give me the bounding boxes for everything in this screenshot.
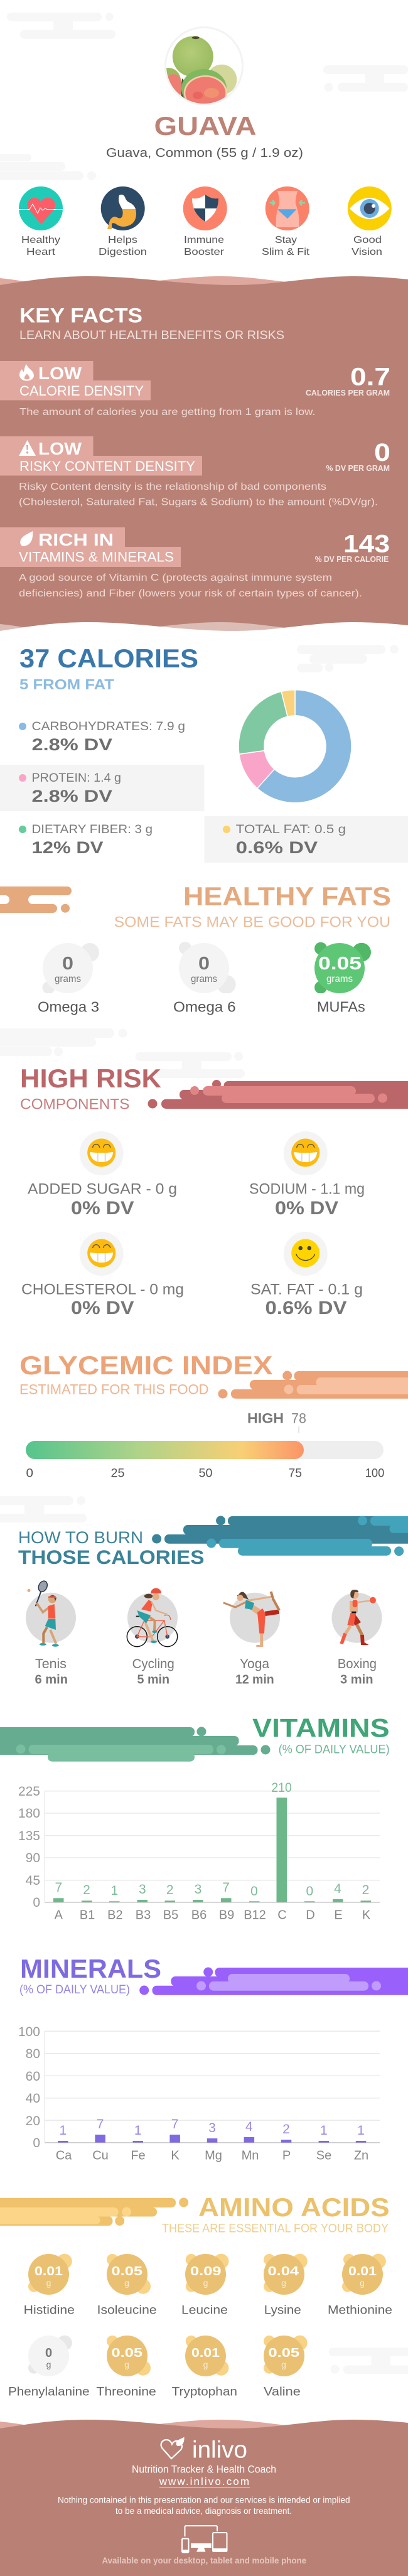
background clouds: below fats — [0, 1028, 245, 1078]
bar chart: vitamins: 3 — [139, 1882, 146, 1897]
bar chart: vitamins: 0 — [33, 1895, 40, 1910]
amino: tryptophan: g — [203, 2359, 208, 2369]
activity durations: 6 min — [35, 1673, 68, 1687]
bar chart: vitamins: B1 — [80, 1909, 95, 1922]
activity durations: 5 min — [137, 1673, 169, 1687]
bar chart: minerals: 1 — [59, 2123, 67, 2138]
heading: HIGH RISK — [20, 1064, 161, 1093]
risk: cholesterol: CHOLESTEROL - 0 mg — [21, 1281, 184, 1298]
amino: leucine: g — [203, 2278, 208, 2288]
name: risky content density: RISKY CONTENT DENSITY — [19, 458, 195, 474]
macro: dietary fiber: 12% DV — [31, 838, 103, 857]
heading: MINERALS — [20, 1954, 161, 1983]
label: healthy heart: Healthy — [21, 235, 60, 245]
icon: devices — [182, 2526, 227, 2553]
bar chart: vitamins: 4 — [334, 1882, 341, 1896]
bar chart: minerals: 3 — [208, 2121, 216, 2135]
fat: mufas: 0.05 — [318, 954, 362, 974]
amino: lysine — [264, 2254, 308, 2317]
heading line 2: THOSE CALORIES — [18, 1546, 205, 1568]
icon: warning — [19, 440, 36, 456]
bar chart: vitamins: B3 — [136, 1909, 151, 1922]
heading line 1: HOW TO BURN — [18, 1528, 143, 1547]
key facts subheading: LEARN ABOUT HEALTH BENEFITS OR RISKS — [19, 328, 284, 342]
header decoration — [0, 2197, 188, 2226]
label: stay slim and fit: Slim & Fit — [262, 247, 310, 257]
heading: VITAMINS — [252, 1713, 390, 1743]
availability note: Available on your desktop, tablet and mobile phone — [102, 2555, 306, 2565]
unit: calories per gram: CALORIES PER GRAM — [306, 388, 390, 397]
icon: flame — [19, 364, 34, 380]
activity durations: 12 min — [235, 1673, 274, 1687]
gi scale: 75 — [289, 1467, 302, 1480]
fact: calorie density — [0, 361, 390, 418]
disclaimer: to be a medical advice, diagnosis or treatment. — [115, 2506, 292, 2516]
bar chart: vitamins: 180 — [18, 1806, 40, 1821]
activity: boxing — [331, 1590, 382, 1645]
amino: phenylalanine: Phenylalanine — [8, 2385, 90, 2398]
subheading: (% OF DAILY VALUE) — [279, 1743, 390, 1757]
disclaimer: Nothing contained in this presentation and our services is intended or implied — [58, 2496, 350, 2505]
unit: percent dv per gram: % DV PER GRAM — [326, 463, 390, 473]
title: GUAVA — [154, 111, 256, 141]
bar chart: minerals: Mg — [205, 2148, 222, 2162]
bar chart: minerals: 7 — [171, 2117, 178, 2131]
risk: added sugar: ADDED SUGAR - 0 g — [28, 1181, 177, 1198]
bar chart: minerals: Se — [316, 2148, 331, 2162]
fat: omega 6 — [173, 942, 236, 1015]
panel: how to burn calories — [18, 1516, 408, 1687]
fat: mufas — [314, 942, 371, 1015]
description: deficiencies) and Fiber (lowers your risk of certain types of cancer). — [19, 588, 362, 599]
amino: lysine: Lysine — [264, 2304, 301, 2317]
bar chart: vitamins: B9 — [219, 1909, 234, 1922]
icon: digestion — [101, 186, 145, 230]
amino: valine — [264, 2336, 308, 2398]
bar chart: vitamins: B12 — [244, 1909, 266, 1922]
icon: good vision — [348, 186, 392, 230]
background cloud — [297, 645, 399, 672]
background clouds: header — [0, 13, 408, 180]
macro: total fat — [205, 816, 408, 863]
gi scale: 100 — [365, 1467, 384, 1480]
fat: mufas: MUFAs — [317, 999, 365, 1015]
panel: amino acids — [0, 2192, 392, 2398]
bar chart: vitamins: 135 — [18, 1829, 40, 1843]
subheading: SOME FATS MAY BE GOOD FOR YOU — [114, 914, 390, 931]
subheading: ESTIMATED FOR THIS FOOD — [19, 1382, 208, 1398]
heading: AMINO ACIDS — [198, 2192, 390, 2222]
gi gauge bar — [26, 1441, 384, 1459]
macro: dietary fiber — [19, 823, 153, 857]
label: healthy heart: Heart — [26, 247, 56, 257]
bar chart: minerals: Zn — [354, 2148, 368, 2162]
activity: yoga — [223, 1592, 280, 1647]
gi scale: 25 — [110, 1467, 124, 1480]
bar chart: vitamins: E — [334, 1909, 343, 1922]
background cloud: glycemic — [0, 1496, 87, 1522]
risk: saturated fat — [250, 1232, 363, 1318]
header decoration — [0, 1727, 270, 1762]
activity durations — [35, 1673, 373, 1687]
macro: total fat: TOTAL FAT: 0.5 g — [236, 823, 346, 836]
bar chart: vitamins: 3 — [195, 1882, 201, 1897]
bar chart: minerals: 1 — [134, 2123, 142, 2138]
bar chart: minerals: Mn — [242, 2148, 259, 2162]
bar chart: vitamins: A — [55, 1909, 63, 1922]
label: immune booster: Immune — [184, 235, 224, 245]
bar chart: minerals: 2 — [282, 2122, 290, 2137]
amino: phenylalanine: g — [46, 2359, 51, 2369]
amino: phenylalanine — [8, 2336, 90, 2398]
bar chart: vitamins: 7 — [222, 1880, 230, 1895]
risk: added sugar: 0% DV — [71, 1198, 134, 1219]
amino: threonine: 0.05 — [112, 2346, 142, 2360]
gi scale: 50 — [198, 1467, 212, 1480]
amino: threonine: Threonine — [96, 2385, 156, 2398]
bar chart: vitamins: B6 — [191, 1909, 207, 1922]
amino: isoleucine: g — [124, 2278, 129, 2288]
key facts heading: KEY FACTS — [19, 304, 142, 326]
unit: percent dv per calorie: % DV PER CALORIE — [315, 554, 389, 564]
description: The amount of calories you are getting from 1 gram is low. — [19, 407, 315, 418]
bar chart: vitamins: D — [306, 1909, 315, 1922]
amino: threonine: g — [124, 2359, 129, 2369]
bar chart: vitamins: 210 — [271, 1781, 292, 1795]
label: immune booster: Booster — [184, 247, 225, 257]
website: www.inlivo.com — [159, 2476, 249, 2487]
gi marker — [247, 1411, 306, 1433]
amino: tryptophan: 0.01 — [191, 2346, 220, 2360]
label: good vision: Good — [353, 235, 382, 245]
subheading: (% OF DAILY VALUE) — [19, 1983, 130, 1997]
rating: low: LOW — [38, 364, 82, 383]
bar chart: vitamins: 90 — [26, 1851, 40, 1865]
panel: calories — [0, 644, 408, 863]
fact: risky content density — [0, 436, 390, 508]
fat: omega 6: 0 — [198, 954, 210, 974]
fat: omega 3: grams — [55, 974, 81, 984]
amino: leucine — [181, 2254, 228, 2317]
header decoration — [218, 1371, 408, 1399]
bar chart: vitamins: 1 — [111, 1883, 118, 1898]
amino: methionine: g — [360, 2278, 365, 2288]
header decoration — [0, 887, 72, 913]
activity: cycling — [127, 1588, 178, 1647]
amino: tryptophan — [172, 2336, 237, 2398]
name: calorie density: CALORIE DENSITY — [19, 383, 144, 399]
bar chart: minerals: Fe — [131, 2148, 146, 2162]
bar chart: vitamins: 45 — [26, 1873, 40, 1888]
bar chart: minerals — [18, 2025, 380, 2162]
risk: saturated fat: SAT. FAT - 0.1 g — [250, 1281, 363, 1298]
macro: carbohydrates — [19, 720, 185, 754]
subheading: THESE ARE ESSENTIAL FOR YOUR BODY — [162, 2221, 389, 2235]
lower wave — [0, 622, 286, 634]
macro: dietary fiber: DIETARY FIBER: 3 g — [31, 823, 153, 836]
risk: sodium: SODIUM - 1.1 mg — [249, 1181, 365, 1198]
description: A good source of Vitamin C (protects against immune system — [19, 573, 332, 583]
bar chart: minerals: 1 — [320, 2123, 328, 2138]
risk: added sugar — [28, 1131, 177, 1219]
amino: tryptophan: Tryptophan — [172, 2385, 237, 2398]
bar chart: minerals: 20 — [26, 2114, 40, 2128]
risk: sodium — [249, 1131, 365, 1219]
header decoration — [148, 1080, 408, 1109]
value: 143: 143 — [343, 531, 390, 558]
bar chart: minerals: Cu — [92, 2148, 109, 2162]
bar chart: minerals: 40 — [26, 2091, 40, 2106]
fat: omega 6: Omega 6 — [173, 999, 236, 1015]
serving subtitle: Guava, Common (55 g / 1.9 oz) — [106, 146, 303, 160]
food photo: guava — [164, 26, 244, 105]
gi marker: HIGH — [247, 1411, 284, 1426]
amino: lysine: 0.04 — [267, 2265, 299, 2278]
activity labels: Tenis — [35, 1657, 67, 1671]
amino: valine: g — [281, 2359, 286, 2369]
fat: omega 3 — [38, 943, 99, 1015]
rating: low: LOW — [38, 439, 82, 458]
heading: HEALTHY FATS — [183, 881, 391, 911]
bar chart: minerals: K — [171, 2148, 180, 2162]
bar chart: minerals: 80 — [26, 2047, 40, 2061]
label: digestion: Digestion — [99, 247, 147, 257]
bar chart: vitamins: B2 — [107, 1909, 123, 1922]
amino: histidine: 0.01 — [35, 2265, 63, 2278]
amino: leucine: Leucine — [181, 2304, 228, 2317]
header decoration — [139, 1968, 408, 1995]
gi scale: 0 — [26, 1467, 33, 1480]
gi marker: 78 — [291, 1411, 306, 1426]
icon: slim and fit — [266, 186, 309, 230]
risk: cholesterol — [21, 1232, 184, 1318]
fat: omega 3: 0 — [62, 954, 73, 974]
fat: omega 6: grams — [191, 974, 217, 984]
bar chart: minerals: 7 — [97, 2117, 104, 2131]
subheading: COMPONENTS — [20, 1096, 129, 1113]
bar chart: minerals: 1 — [357, 2123, 365, 2138]
amino: valine: Valine — [264, 2385, 301, 2398]
label: digestion: Helps — [108, 235, 137, 245]
macro: carbohydrates: 2.8% DV — [31, 735, 112, 754]
value: 0: 0 — [374, 439, 390, 466]
bar chart: vitamins: 2 — [83, 1883, 90, 1897]
fat: mufas: grams — [326, 974, 353, 984]
amino: methionine — [328, 2254, 392, 2317]
bar chart: vitamins: 2 — [166, 1883, 174, 1897]
bar chart: vitamins: C — [277, 1909, 287, 1922]
activity labels: Boxing — [338, 1657, 377, 1671]
icon: immune shield — [183, 186, 227, 230]
fat: omega 3: Omega 3 — [38, 999, 99, 1015]
bar chart: minerals: Ca — [56, 2148, 72, 2162]
panel: minerals — [18, 1954, 408, 2162]
bar chart: vitamins: B5 — [163, 1909, 178, 1922]
risk: sodium: 0% DV — [275, 1198, 338, 1219]
panel: glycemic index — [19, 1350, 408, 1480]
calories from fat: 5 FROM FAT — [19, 676, 114, 693]
bar chart: vitamins: 0 — [250, 1884, 258, 1899]
bar chart: minerals: 0 — [33, 2136, 40, 2150]
bar chart: minerals: 4 — [245, 2120, 253, 2134]
bar chart: minerals: 60 — [26, 2069, 40, 2084]
panel: high risk components — [20, 1064, 408, 1318]
macro: total fat: 0.6% DV — [236, 838, 318, 857]
activity labels: Cycling — [132, 1657, 174, 1671]
bar chart: vitamins: 7 — [55, 1880, 62, 1895]
label: good vision: Vision — [352, 247, 382, 257]
risk: cholesterol: 0% DV — [71, 1298, 134, 1318]
macro: protein: 2.8% DV — [31, 787, 112, 806]
background cloud: amino — [329, 2348, 408, 2374]
fact: rich in vitamins and minerals — [0, 527, 390, 599]
bar chart: minerals: 100 — [18, 2025, 40, 2039]
header decoration — [152, 1516, 408, 1556]
logo: inlivo — [161, 2437, 247, 2463]
bar chart: minerals: P — [282, 2148, 291, 2162]
panel: vitamins — [0, 1713, 390, 1922]
amino: threonine — [96, 2336, 156, 2398]
value: 0.7: 0.7 — [350, 363, 390, 391]
icon: healthy heart — [19, 186, 63, 230]
amino: methionine: Methionine — [328, 2304, 392, 2317]
panel: footer — [0, 2420, 408, 2576]
activity: tennis — [26, 1580, 76, 1647]
amino: isoleucine — [97, 2254, 157, 2317]
tagline: Nutrition Tracker & Health Coach — [132, 2463, 276, 2475]
amino: leucine: 0.09 — [190, 2265, 221, 2278]
icon: leaf — [20, 531, 33, 546]
bar chart: vitamins — [18, 1781, 380, 1922]
amino: histidine — [24, 2254, 75, 2317]
bar chart: vitamins: K — [362, 1909, 371, 1922]
name: vitamins and minerals: VITAMINS & MINERALS — [19, 549, 174, 565]
heading: GLYCEMIC INDEX — [19, 1350, 272, 1380]
bar chart: vitamins: 0 — [306, 1884, 313, 1899]
rating: rich in: RICH IN — [38, 530, 114, 549]
activity labels — [35, 1657, 377, 1671]
macro: protein — [0, 765, 205, 811]
calories heading: 37 CALORIES — [19, 644, 198, 673]
bar chart: vitamins: 2 — [362, 1883, 369, 1897]
panel: healthy fats — [0, 881, 391, 1015]
benefits row — [19, 186, 392, 257]
macro: carbohydrates: CARBOHYDRATES: 7.9 g — [31, 720, 185, 733]
bar chart: vitamins: 225 — [18, 1784, 40, 1799]
macro: protein: PROTEIN: 1.4 g — [31, 772, 121, 785]
activity labels: Yoga — [240, 1657, 269, 1671]
amino: isoleucine: 0.05 — [112, 2265, 142, 2278]
activity durations: 3 min — [340, 1673, 373, 1687]
description: (Cholesterol, Saturated Fat, Sugars & Sodium) to the amount (%DV/gr). — [19, 497, 378, 508]
amino: isoleucine: Isoleucine — [97, 2304, 157, 2317]
donut chart — [239, 690, 352, 803]
logo: inlivo: inlivo — [192, 2437, 247, 2463]
label: stay slim and fit: Stay — [275, 235, 297, 245]
amino: methionine: 0.01 — [348, 2265, 377, 2278]
panel: key facts — [0, 276, 408, 635]
amino: phenylalanine: 0 — [45, 2346, 52, 2360]
risk: saturated fat: 0.6% DV — [265, 1298, 346, 1318]
gi scale — [26, 1467, 384, 1480]
amino: histidine: g — [46, 2278, 51, 2288]
amino: histidine: Histidine — [24, 2304, 75, 2317]
amino: valine: 0.05 — [269, 2346, 299, 2360]
description: Risky Content density is the relationship of bad components — [19, 482, 326, 492]
amino: lysine: g — [281, 2278, 286, 2288]
